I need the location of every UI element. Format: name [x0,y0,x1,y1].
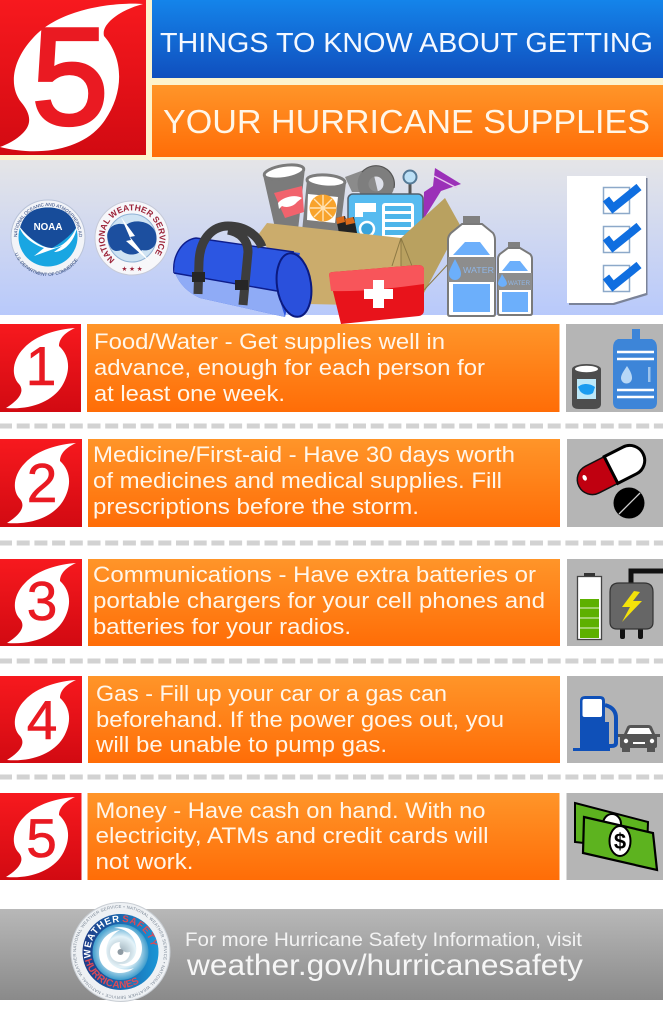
NOAA logo: NOAA [34,222,62,233]
duffel bag [174,226,315,319]
first-aid kit [329,265,424,324]
number badge 2 [0,439,82,527]
supply row 1: food and water [0,324,663,412]
text: food and water: Food/Water - Get supplies well in [94,329,445,354]
text: communications: batteries for your radios. [93,614,351,639]
NOAA logo: U.S. DEPARTMENT OF COMMERCE [15,252,78,276]
banner panel: agency logos and supplies [0,160,663,324]
text: medicine and first aid: Medicine/First-aid - Have 30 days worth [93,442,515,467]
text: food and water: at least one week. [94,381,285,406]
text: medicine and first aid: of medicines and medical supplies. Fill [93,468,502,493]
large water bottle [448,216,495,316]
divider [0,774,663,780]
duct tape [345,166,394,197]
National Weather Service logo: NATIONAL WEATHER SERVICE [98,204,166,264]
supply row 4: gas [0,676,663,763]
logo: hurricane symbol with 5 [0,0,146,155]
weather safety hurricanes seal: WEATHER [84,916,120,958]
number badge 1 [0,324,81,412]
divider [0,540,663,546]
text: communications [88,559,560,646]
icon: capsule and tablet [567,439,663,527]
text: communications: Communications - Have extra batteries or [93,562,537,587]
can with orange label [302,174,346,232]
number badge 3 [0,559,82,646]
divider [0,658,663,664]
supply row 5: money [0,793,663,880]
text: money: electricity, ATMs and credit cards will [96,823,488,848]
footer text [185,929,583,982]
number badge 4 [0,676,82,763]
number badge 5: 5 [26,807,57,869]
number badge 3: 3 [27,570,57,632]
checklist [567,176,648,305]
header: logo and title [0,0,663,160]
batteries [336,216,358,238]
text: food and water [87,324,560,412]
supply row 2: medicine [0,439,663,527]
text: gas: will be unable to pump gas. [95,732,387,757]
icon: gas pump and car [567,676,663,763]
weather safety hurricanes seal [70,902,170,1002]
weather safety hurricanes seal: SAFETY [122,916,158,945]
can with fish label [263,162,305,230]
small water bottle [498,242,532,315]
footer text: weather.gov/hurricanesafety [186,949,583,982]
text: money [88,793,560,880]
logo: hurricane symbol with 5: 5 [32,0,108,154]
number badge 5 [0,793,82,880]
text: gas: Gas - Fill up your car or a gas can [96,681,447,706]
large water bottle: WATER [463,265,494,275]
text: medicine and first aid: prescriptions before the storm. [93,494,419,519]
text: communications: portable chargers for your cell phones and [93,588,545,613]
small water bottle: WATER [508,280,530,287]
radio [348,170,423,242]
title line 1 [152,0,663,78]
title line 2: YOUR HURRICANE SUPPLIES [163,103,650,140]
text: money: not work. [96,849,194,874]
number badge 2: 2 [27,452,57,514]
text: gas [88,676,560,763]
supply row 3: communications [0,559,663,646]
National Weather Service logo: ★ ★ ★ [121,265,143,273]
weather safety hurricanes seal: HURRICANES [85,958,138,988]
icon: can and water jug [566,324,663,412]
flashlight [423,168,461,220]
divider [0,424,663,428]
number badge 4: 4 [27,689,57,751]
title line 2 [152,85,663,157]
text: medicine and first aid [88,439,560,527]
weather safety hurricanes seal: NATIONAL WEATHER SERVICE • NATIONAL WEATHER SERVICE • NATIONAL WEATHER SERVICE • NATIONAL WEATHER SERVICE • NATIONAL WEATHER SERVICE [73,905,167,999]
cardboard box [258,198,460,306]
icon: battery and charger [567,559,663,646]
text: gas: beforehand. If the power goes out, you [96,707,504,732]
number badge 1: 1 [26,335,56,397]
footer text: For more Hurricane Safety Information, visit [185,929,583,951]
text: food and water: advance, enough for each person for [94,355,486,380]
title line 1: THINGS TO KNOW ABOUT GETTING [160,27,653,58]
NOAA logo [10,200,86,276]
icon: cash bills [566,793,663,880]
text: money: Money - Have cash on hand. With no [96,798,486,823]
icon: cash bills: $ [614,829,626,854]
